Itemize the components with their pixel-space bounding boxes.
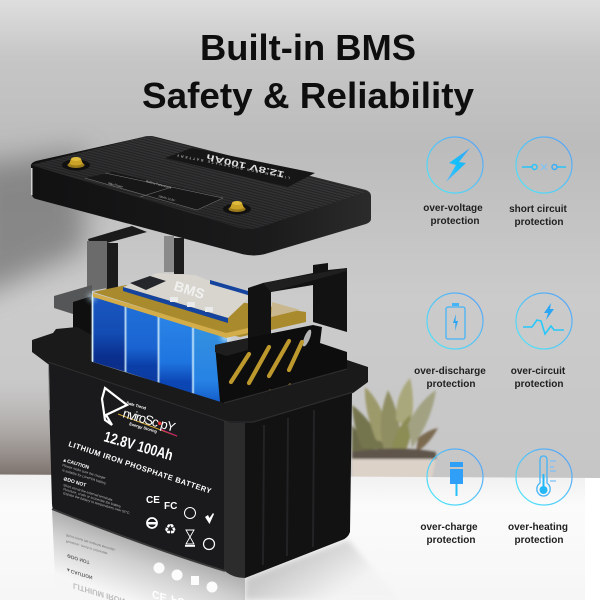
- title: Built-in BMS: [200, 27, 416, 68]
- battery reflection: ⊘DO NOT: [67, 552, 90, 565]
- battery reflection: ▲CAUTION: [66, 566, 93, 580]
- certification marks: [146, 495, 214, 550]
- label: over-charge: protection: [427, 535, 475, 546]
- terminal block: [215, 325, 347, 405]
- box front face: [48, 362, 225, 571]
- box side face: [224, 392, 352, 578]
- caution text: ▲CAUTION: [61, 457, 90, 471]
- lid label plate: [165, 148, 315, 187]
- label: over-voltage: over-voltage: [423, 203, 483, 214]
- label: over-charge: over-charge: [420, 522, 478, 533]
- left terminal: [62, 157, 90, 170]
- lid label plate: 12.8V 100Ah: [205, 152, 285, 180]
- caution text: [61, 457, 131, 515]
- label: over-discharge: [414, 366, 486, 390]
- right terminal: [223, 201, 251, 214]
- label: short circuit: short circuit: [509, 204, 568, 215]
- lid: [31, 136, 371, 256]
- lid spec table: 100Ah 12.8V: [158, 194, 176, 202]
- title: Safety & Reliability: [142, 75, 474, 116]
- label: over-discharge: protection: [427, 379, 475, 390]
- battery reflection: Puncture, crush or incinerate.: [66, 539, 108, 556]
- lid label plate: LITHIUM IRON PHOSPHATE BATTERY: [176, 153, 290, 180]
- battery reflection: Short circuit the external terminals.: [66, 533, 116, 552]
- battery cells: [88, 294, 230, 405]
- left side plate: [54, 285, 92, 362]
- caution text: Short circuit the external terminals.: [63, 483, 114, 502]
- lid spec table: [85, 172, 223, 210]
- icon: battery: [427, 293, 483, 349]
- label: over-heating: over-heating: [508, 522, 568, 533]
- BMS board: [123, 273, 250, 323]
- logo: Energy Storing: [129, 421, 158, 434]
- caution text: is suitable for LiFePO4 battery.: [62, 468, 107, 486]
- label: over-heating: [508, 522, 568, 546]
- table surface: [0, 474, 600, 600]
- lid spec table: Battery Parameters: [146, 179, 172, 190]
- label: over-voltage: protection: [431, 216, 479, 227]
- label: over-voltage: [423, 203, 483, 227]
- certification marks: CE: [146, 495, 160, 506]
- label: over-discharge: over-discharge: [414, 366, 486, 377]
- label: over-circuit: protection: [515, 379, 563, 390]
- title: [142, 27, 474, 116]
- icon: charge plug: [427, 449, 483, 505]
- back left bracket: [87, 226, 184, 292]
- label: over-circuit: over-circuit: [511, 366, 566, 377]
- potted plant: [352, 378, 438, 478]
- right bracket: [248, 263, 347, 345]
- label: over-circuit: [511, 366, 566, 390]
- certification marks: ♻: [164, 521, 177, 537]
- logo: Safe Trend: [126, 400, 147, 411]
- product name: LITHIUM IRON PHOSPHATE BATTERY: [67, 439, 212, 495]
- caution text: Please make sure the charger: [62, 463, 107, 480]
- logo: nviroSc•pY: [121, 405, 178, 435]
- icon: lightning bolt: [427, 137, 483, 193]
- caution text: ⊘DO NOT: [62, 476, 87, 489]
- logo: [102, 388, 178, 436]
- battery reflection: [52, 509, 400, 600]
- label: over-heating: protection: [515, 535, 563, 546]
- icon: pulse and bolt: [516, 293, 572, 349]
- box rim: [32, 340, 368, 423]
- icon: thermometer: [516, 449, 572, 505]
- label: over-charge: [420, 522, 478, 546]
- label: short circuit: [509, 204, 568, 228]
- gold terminal strips: [231, 341, 302, 401]
- back rim: [32, 327, 92, 362]
- gold cell top: [93, 285, 306, 338]
- caution text: Puncture, crush or incinerate the battery.: [63, 487, 122, 509]
- capacity text: 12.8V 100Ah: [102, 429, 175, 464]
- lid spec table: Max.Power: [108, 181, 123, 189]
- certification marks: FC: [164, 501, 177, 512]
- label: short circuit: protection: [515, 217, 563, 228]
- battery exploded view: [31, 136, 371, 578]
- icon: short circuit: [516, 137, 572, 193]
- caution text: Expose the battery to temperatures over 55°C.: [63, 491, 131, 515]
- BMS board: BMS: [172, 278, 207, 302]
